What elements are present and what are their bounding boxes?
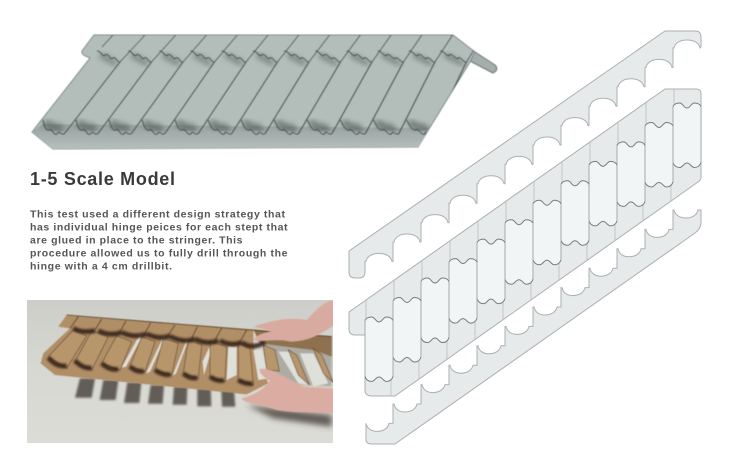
hand: lower <box>242 369 333 413</box>
description text: hinge with a 4 cm drillbit. <box>30 260 172 272</box>
model treads <box>43 35 513 134</box>
hand: upper <box>253 300 333 342</box>
model body <box>32 35 475 149</box>
dowel <box>468 50 497 73</box>
top model photograph <box>32 35 513 149</box>
description text: are glued in place to the stringer. This <box>30 234 243 246</box>
top stringer <box>349 31 701 278</box>
description text: has individual hinge peices for each stept that <box>30 222 288 234</box>
middle stringer with hinge pieces <box>349 89 701 396</box>
main wooden board <box>41 315 268 394</box>
hinge pieces <box>365 103 701 381</box>
stringer outline <box>349 89 701 396</box>
description text <box>30 208 288 272</box>
bottom strip shading <box>32 124 430 149</box>
bottom stringer <box>366 210 701 444</box>
description text: This test used a different design strategy that <box>30 208 286 220</box>
burn marks <box>48 328 265 384</box>
board separators <box>67 315 332 342</box>
title: 1-5 Scale Model <box>30 169 175 189</box>
ground shadows <box>75 378 332 427</box>
right wooden strip <box>253 329 332 357</box>
white slits <box>122 334 328 387</box>
wooden treads <box>48 330 333 385</box>
description text: procedure allowed us to fully drill through the <box>30 248 288 260</box>
step separators <box>366 89 674 396</box>
photo of hands flexing the laser-cut model <box>27 300 333 443</box>
right section background gaps <box>260 337 332 387</box>
